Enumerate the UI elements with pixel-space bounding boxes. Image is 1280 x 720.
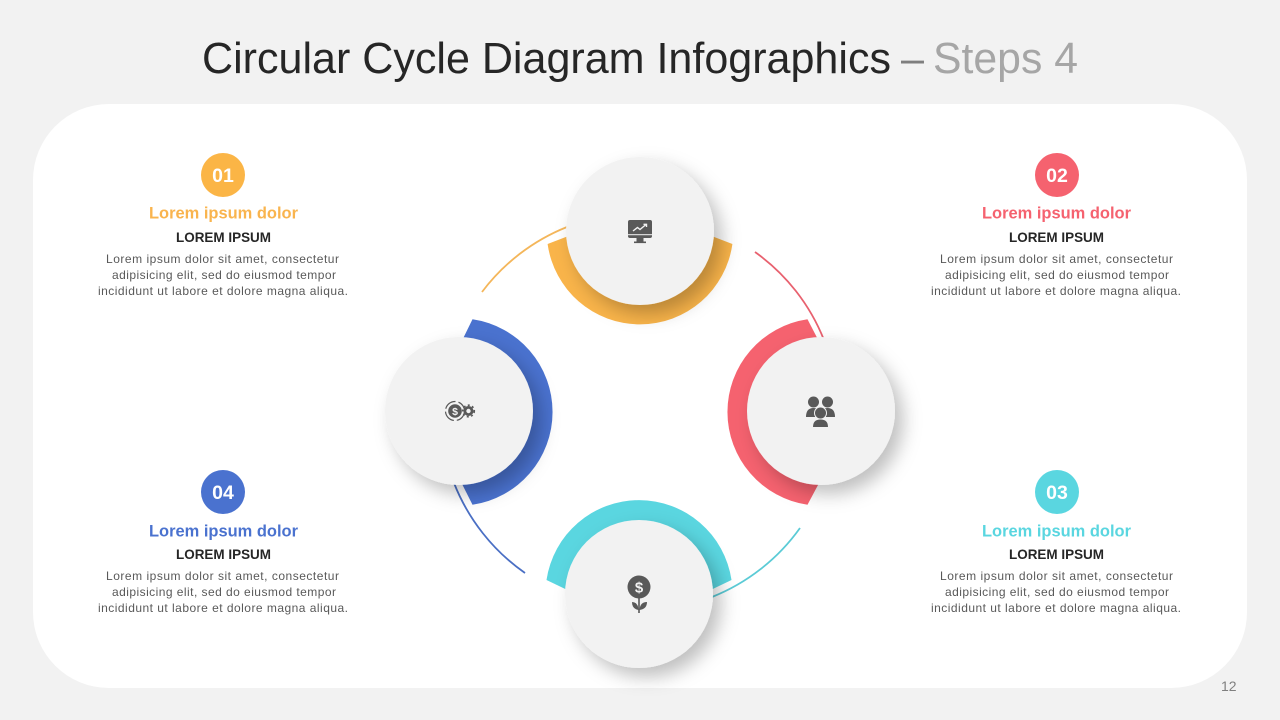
circle: bottom <box>565 520 713 668</box>
step 04 text block <box>98 470 348 615</box>
icon: money plant <box>628 576 650 613</box>
ring segment: teal <box>546 500 732 598</box>
body 03: incididunt ut labore et dolore magna aliqua. <box>931 601 1181 615</box>
body 02: Lorem ipsum dolor sit amet, consectetur <box>940 252 1173 266</box>
body 03 <box>931 569 1181 615</box>
body 01: incididunt ut labore et dolore magna aliqua. <box>98 284 348 298</box>
badge 01 <box>201 153 245 197</box>
heading 03: Lorem ipsum dolor <box>982 522 1132 540</box>
subheading 01: LOREM IPSUM <box>176 229 271 245</box>
subheading 03: LOREM IPSUM <box>1009 546 1104 562</box>
heading 02: Lorem ipsum dolor <box>982 204 1132 222</box>
body 02: adipisicing elit, sed do eiusmod tempor <box>945 268 1169 282</box>
title: Steps 4 <box>933 34 1078 83</box>
circle: left <box>385 337 533 485</box>
ring segment: blue <box>455 319 553 505</box>
body 04: incididunt ut labore et dolore magna aliqua. <box>98 601 348 615</box>
thin arc: blue <box>454 483 525 573</box>
body 02: incididunt ut labore et dolore magna aliqua. <box>931 284 1181 298</box>
ring segment: red <box>727 319 826 505</box>
thin arc: orange <box>482 227 567 292</box>
body 02 <box>931 252 1181 298</box>
icon: money plant: $ <box>635 580 644 596</box>
body 03: Lorem ipsum dolor sit amet, consectetur <box>940 569 1173 583</box>
icon: dollar cycle and gear <box>446 402 474 420</box>
badge 03: 03 <box>1046 482 1068 504</box>
badge 04 <box>201 470 245 514</box>
body 04 <box>98 569 348 615</box>
icon: monitor with chart <box>628 220 652 243</box>
body 04: Lorem ipsum dolor sit amet, consectetur <box>106 569 339 583</box>
title: Circular Cycle Diagram Infographics <box>202 34 891 83</box>
body 01: adipisicing elit, sed do eiusmod tempor <box>112 268 336 282</box>
heading 04: Lorem ipsum dolor <box>149 522 299 540</box>
badge 01: 01 <box>212 165 234 187</box>
step 03 text block <box>931 470 1181 615</box>
title: – <box>901 34 924 83</box>
circle: right <box>747 337 895 485</box>
page number: 12 <box>1221 678 1237 694</box>
badge 02: 02 <box>1046 165 1068 187</box>
circle: top <box>566 157 714 305</box>
heading 01: Lorem ipsum dolor <box>149 204 299 222</box>
badge 04: 04 <box>212 482 234 504</box>
body 01: Lorem ipsum dolor sit amet, consectetur <box>106 252 339 266</box>
thin arc: teal <box>712 528 800 597</box>
thin arc: red <box>755 252 824 340</box>
body 04: adipisicing elit, sed do eiusmod tempor <box>112 585 336 599</box>
step 01 text block <box>98 153 348 298</box>
subheading 02: LOREM IPSUM <box>1009 229 1104 245</box>
ring segment: orange <box>548 230 732 324</box>
cycle diagram <box>385 157 895 668</box>
subheading 04: LOREM IPSUM <box>176 546 271 562</box>
badge 02 <box>1035 153 1079 197</box>
body 03: adipisicing elit, sed do eiusmod tempor <box>945 585 1169 599</box>
badge 03 <box>1035 470 1079 514</box>
panel: main white card <box>33 104 1247 688</box>
body 01 <box>98 252 348 298</box>
icon: dollar cycle and gear: $ <box>452 406 458 418</box>
step 02 text block <box>931 153 1181 298</box>
icon: people group <box>806 396 835 427</box>
